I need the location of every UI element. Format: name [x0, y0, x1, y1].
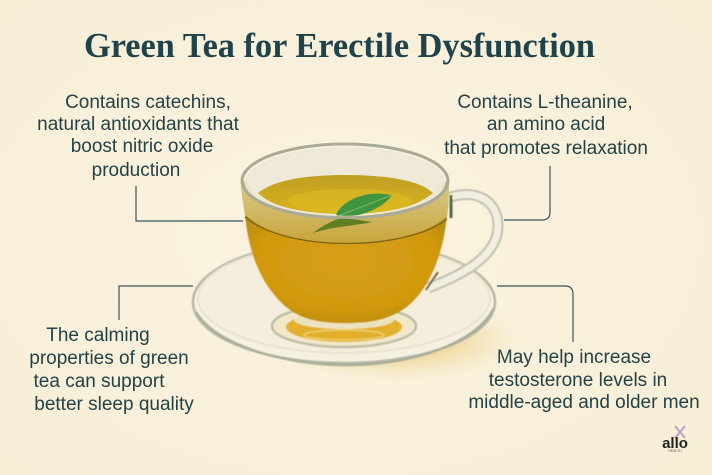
callout: L-theanine: an amino acid [487, 114, 605, 135]
callout: catechins: production [92, 160, 180, 181]
logo: allo health: HEALTH [668, 449, 682, 453]
tea surface [258, 175, 433, 215]
saucer shadow [270, 302, 520, 378]
callout: sleep: properties of green [29, 348, 189, 369]
title: Green Tea for Erectile Dysfunction [84, 26, 595, 65]
callout: testosterone: middle-aged and older men [468, 392, 700, 413]
callout: catechins: natural antioxidants that [37, 114, 240, 135]
cup foot [272, 305, 416, 347]
callout: catechins: Contains catechins, [65, 92, 231, 113]
callout: sleep: better sleep quality [34, 394, 194, 415]
callout: testosterone: testosterone levels in [489, 370, 667, 391]
tea line [245, 217, 447, 244]
callout: L-theanine [444, 92, 648, 159]
illustration: cup of green tea [193, 144, 520, 378]
handle [426, 194, 498, 290]
logo mark [675, 426, 685, 438]
callout: L-theanine: that promotes relaxation [444, 138, 648, 159]
callout: testosterone: May help increase [497, 347, 651, 368]
rim [242, 144, 448, 218]
callout: sleep [29, 325, 194, 415]
callout: L-theanine: Contains L-theanine, [457, 92, 633, 113]
callout: catechins [37, 92, 240, 181]
inner wall [247, 147, 443, 215]
logo: allo health [662, 426, 688, 453]
leaf [313, 194, 392, 233]
connector lines [119, 166, 573, 342]
callout: sleep: tea can support [34, 371, 165, 392]
callout: testosterone [468, 347, 700, 413]
callout: catechins: boost nitric oxide [71, 136, 213, 157]
logo: allo health: allo [662, 435, 688, 452]
cup glass wall [241, 181, 449, 243]
tea body [245, 210, 447, 323]
saucer [193, 241, 495, 365]
callout: sleep: The calming [46, 325, 150, 346]
